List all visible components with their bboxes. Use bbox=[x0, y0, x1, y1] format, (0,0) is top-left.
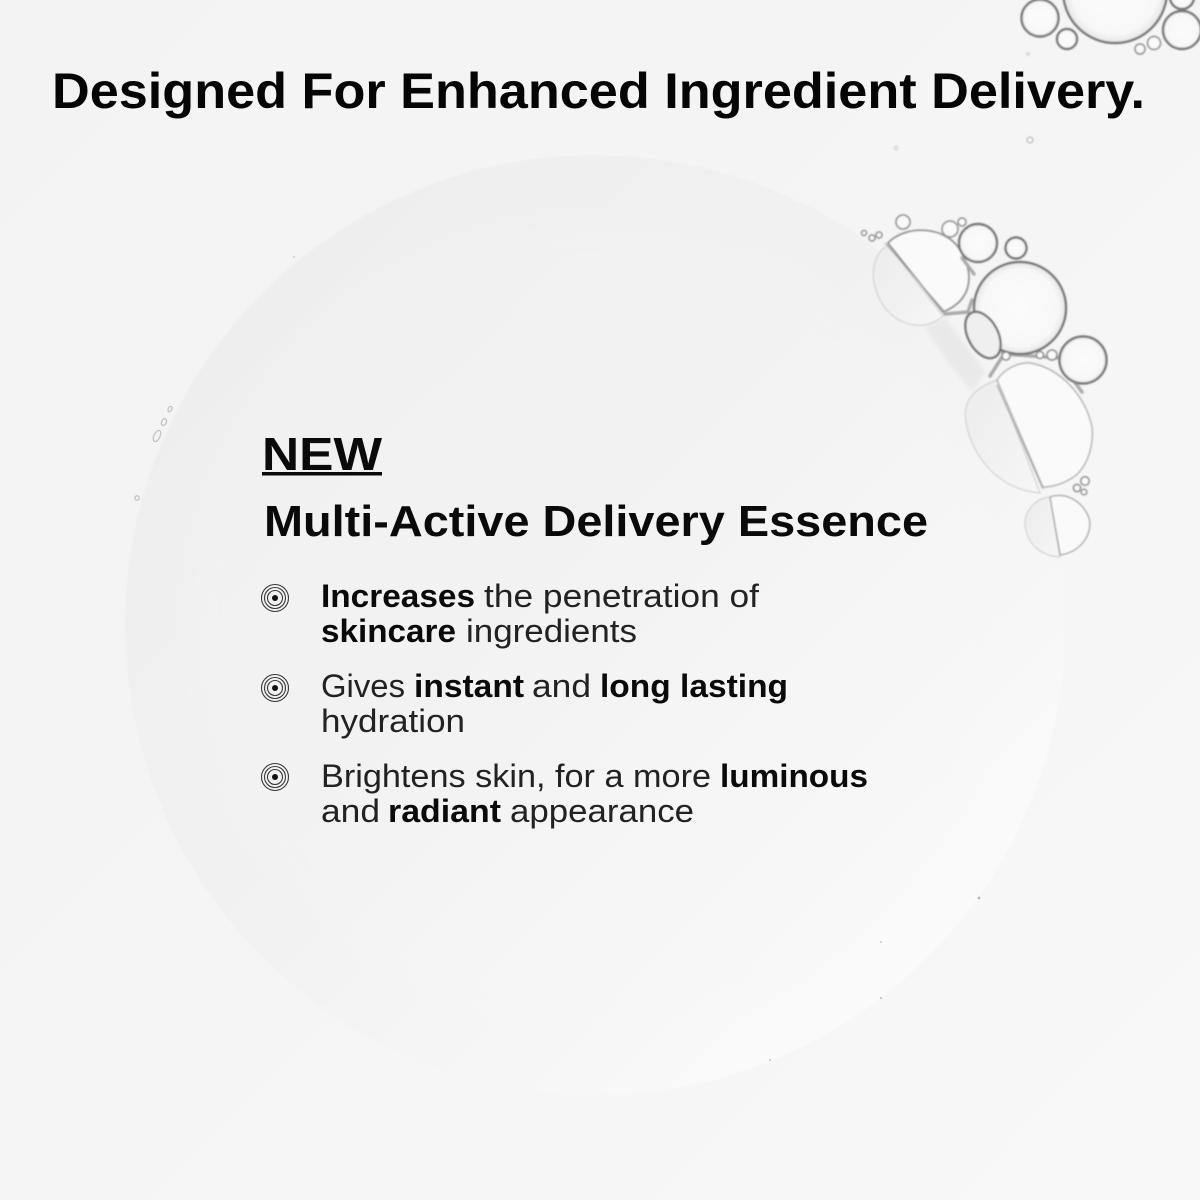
benefit 1: the penetration of bbox=[484, 578, 759, 614]
bubble: upper split bbox=[873, 230, 969, 325]
product name: Multi-Active Delivery Essence bbox=[264, 497, 928, 546]
benefit 3: and bbox=[321, 793, 380, 829]
heading: NEW: NEW bbox=[262, 428, 383, 480]
small top bubbles bbox=[862, 215, 1026, 262]
benefit 2 bbox=[262, 668, 788, 739]
icon: concentric target bbox=[262, 764, 288, 790]
oval bubble bbox=[958, 306, 1008, 364]
right bubble bbox=[1060, 336, 1106, 384]
title: Designed For Enhanced Ingredient Delivery. bbox=[52, 63, 1145, 119]
benefit 1: Increases bbox=[321, 578, 475, 614]
benefit 2: and bbox=[532, 668, 591, 704]
bubble: bottom split bbox=[1025, 496, 1090, 557]
large bubble bbox=[974, 262, 1066, 354]
bubbles: top right corner bbox=[894, 0, 1200, 150]
benefit 1 bbox=[262, 578, 759, 649]
benefit 3: appearance bbox=[510, 793, 694, 829]
benefit 3: Brightens skin, for a more bbox=[321, 758, 711, 794]
bubble cluster bbox=[862, 215, 1106, 557]
bubble: large split bbox=[965, 363, 1092, 493]
tiny bubbles near bottom bbox=[1073, 477, 1089, 495]
benefit 3 bbox=[262, 758, 868, 829]
benefit 2: long lasting bbox=[600, 668, 788, 704]
small droplets on disc edge bbox=[135, 256, 980, 1061]
junction bubbles bbox=[1002, 350, 1057, 360]
icon: concentric target bbox=[262, 584, 288, 612]
essence droplet disc bbox=[125, 155, 1065, 1095]
glass column between bubbles bbox=[925, 318, 985, 392]
benefit 1: ingredients bbox=[466, 613, 637, 649]
benefit 3: radiant bbox=[388, 793, 501, 829]
benefit 2: instant bbox=[414, 668, 524, 704]
benefit 2: Gives bbox=[321, 668, 405, 704]
benefit 1: skincare bbox=[321, 613, 456, 649]
benefit 2: hydration bbox=[321, 703, 465, 739]
icon: concentric target bbox=[262, 674, 288, 702]
bubble webs bbox=[945, 258, 1082, 392]
benefit 3: luminous bbox=[720, 758, 868, 794]
